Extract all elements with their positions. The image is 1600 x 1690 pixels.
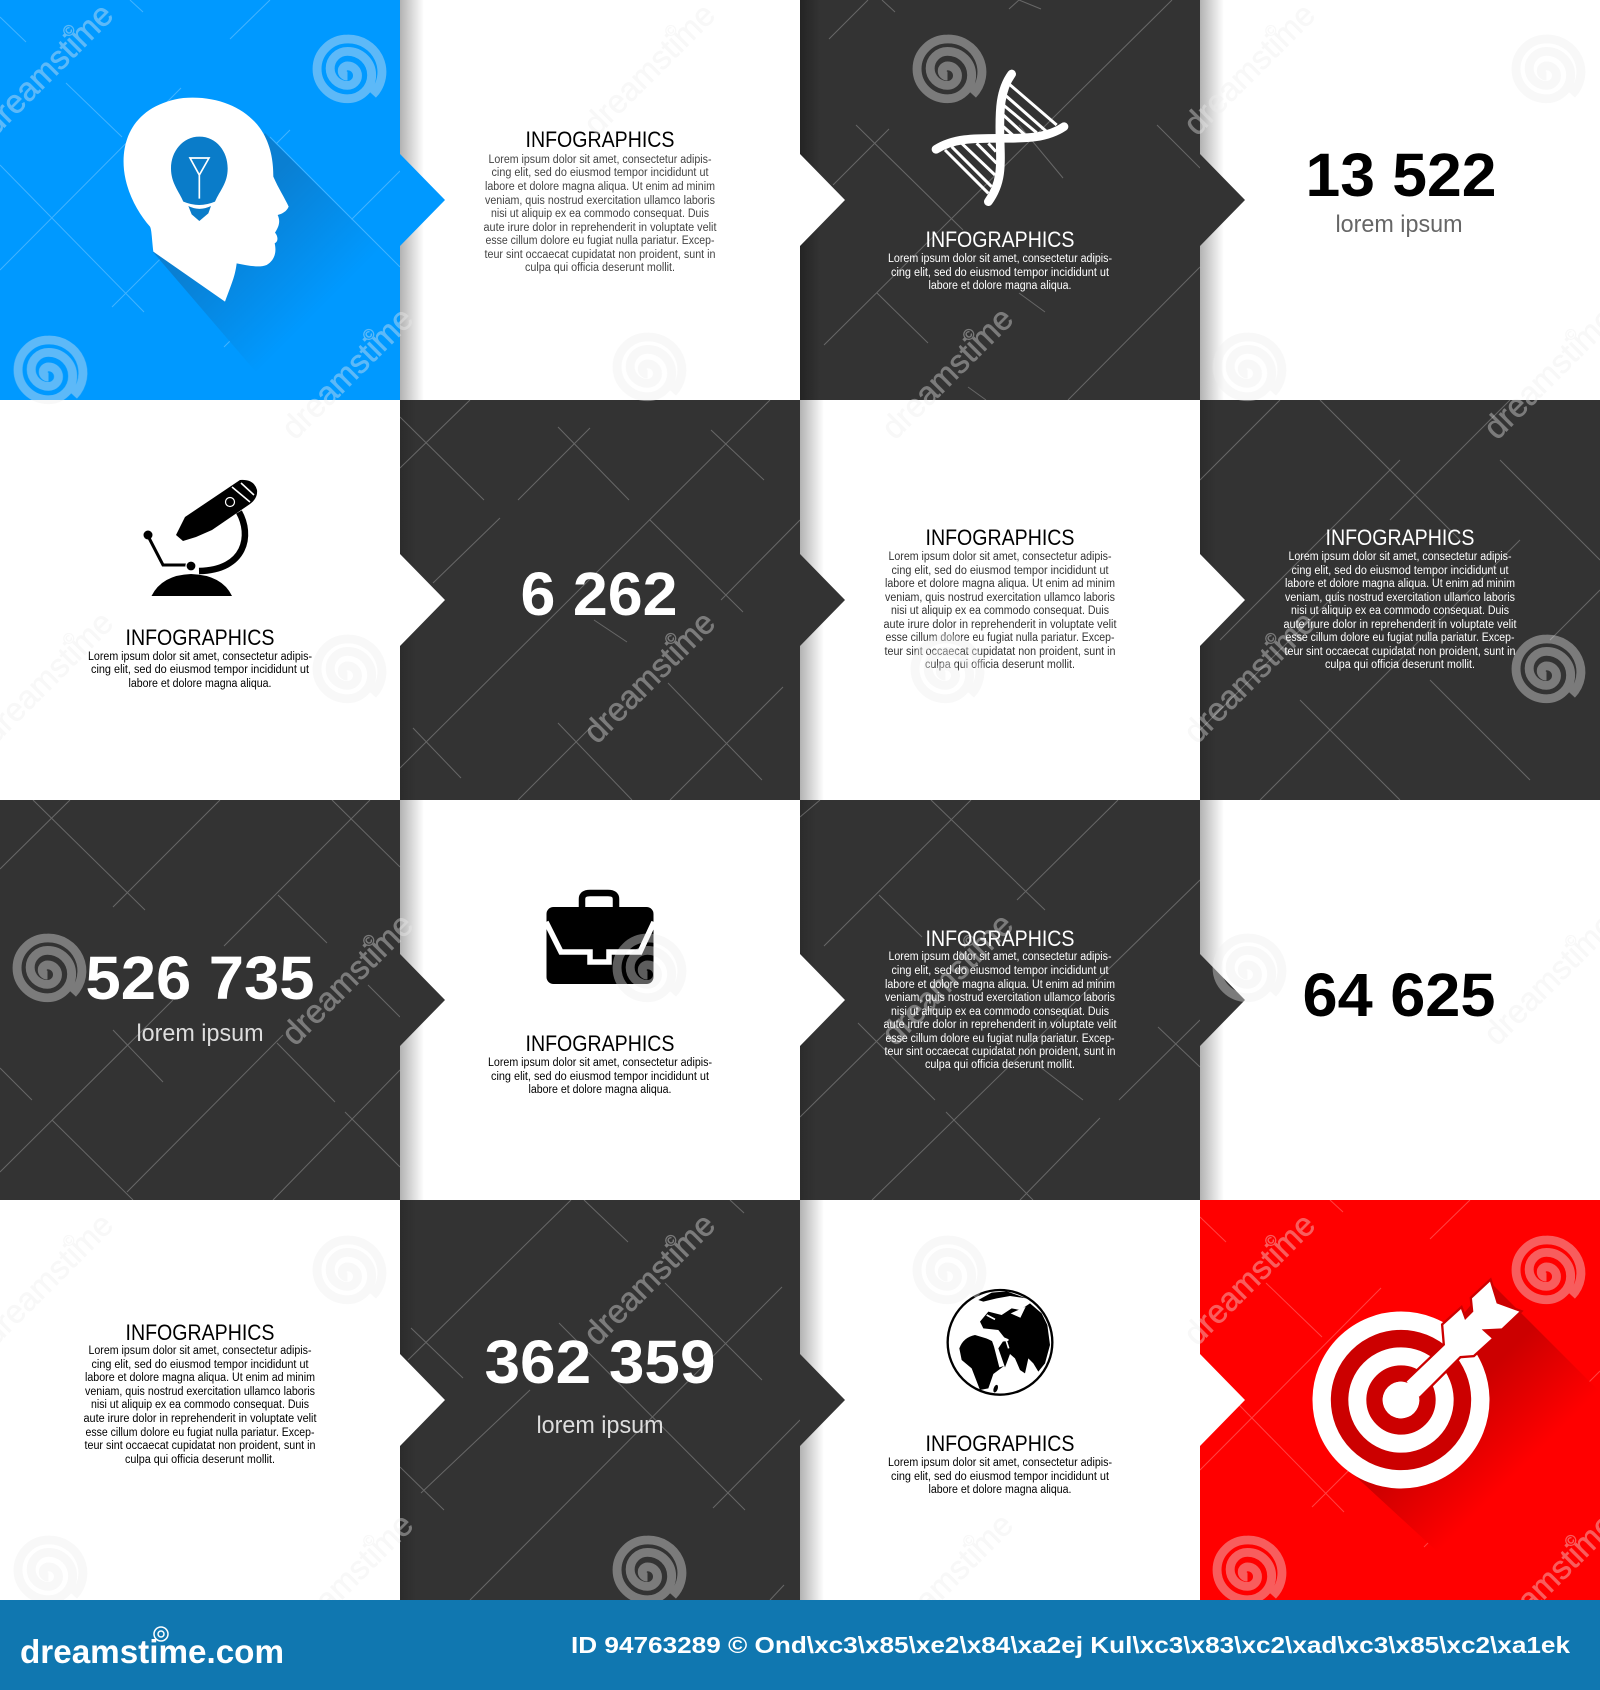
icon: briefcase — [546, 893, 654, 984]
watermark overlay: dreamstime spirals and wordmarks: © — [59, 21, 79, 41]
text block: row 2 column 4: Lorem ipsum dolor sit amet, consectetur adipis- — [1288, 551, 1512, 563]
icon: target with arrow — [1322, 1282, 1519, 1479]
text block: row 3 column 3: aute irure dolor in reprehenderit in voluptate velit — [884, 1019, 1117, 1031]
text block: row 1 column 2: Lorem ipsum dolor sit amet, consectetur adipis- — [488, 154, 712, 166]
icon: head with light bulb — [124, 98, 289, 302]
text block: row 3 column 2: INFOGRAPHICS — [526, 1031, 674, 1056]
text block: row 3 column 3 — [884, 926, 1117, 1071]
stat: 13 522 — [1306, 141, 1496, 238]
text block: row 1 column 2: INFOGRAPHICS — [526, 127, 674, 152]
text block: row 2 column 3: aute irure dolor in reprehenderit in voluptate velit — [884, 619, 1117, 631]
text block: row 2 column 4: aute irure dolor in reprehenderit in voluptate velit — [1284, 619, 1517, 631]
icon: dna helix — [936, 74, 1064, 202]
text block: row 2 column 3: veniam, quis nostrud exercitation ullamco laboris — [885, 592, 1115, 604]
text block: row 3 column 3: culpa qui officia deserunt mollit. — [925, 1059, 1075, 1071]
text block: row 4 column 1: Lorem ipsum dolor sit amet, consectetur adipis- — [88, 1345, 312, 1357]
text block: row 4 column 3: INFOGRAPHICS — [926, 1431, 1074, 1456]
text block: row 1 column 2: teur sint occaecat cupidatat non proident, sunt in — [484, 249, 716, 261]
text block: row 4 column 1: esse cillum dolore eu fugiat nulla pariatur. Excep- — [86, 1427, 315, 1439]
stat: 526 735 — [86, 944, 314, 1047]
text block: row 2 column 1: labore et dolore magna aliqua. — [128, 678, 272, 690]
stat: 13 522: 13 522 — [1306, 141, 1496, 209]
stat: 13 522: lorem ipsum — [1336, 211, 1462, 238]
text block: row 2 column 4: INFOGRAPHICS — [1326, 525, 1474, 550]
text block: row 4 column 1 — [84, 1320, 317, 1466]
stat: 362 359: lorem ipsum — [536, 1412, 664, 1439]
text block: row 1 column 2: esse cillum dolore eu fugiat nulla pariatur. Excep- — [486, 235, 715, 247]
text block: row 2 column 1: cing elit, sed do eiusmod tempor incididunt ut — [91, 664, 310, 676]
text block: row 2 column 4: teur sint occaecat cupidatat non proident, sunt in — [1284, 646, 1516, 658]
text block: row 4 column 1: nisi ut aliquip ex ea commodo consequat. Duis — [91, 1399, 309, 1411]
text block: row 1 column 3: labore et dolore magna aliqua. — [928, 280, 1072, 292]
icon shadow: head long shadow — [153, 133, 400, 400]
stat: 64 625: 64 625 — [1302, 961, 1496, 1029]
arrow connectors — [400, 154, 1245, 1446]
text block: row 2 column 1: INFOGRAPHICS — [126, 625, 274, 650]
text block: row 2 column 4: esse cillum dolore eu fugiat nulla pariatur. Excep- — [1286, 632, 1515, 644]
text block: row 2 column 3: teur sint occaecat cupidatat non proident, sunt in — [884, 646, 1116, 658]
text block: row 2 column 3: labore et dolore magna aliqua. Ut enim ad minim — [885, 578, 1115, 590]
stat: 526 735: lorem ipsum — [136, 1020, 264, 1047]
text block: row 4 column 1: INFOGRAPHICS — [126, 1320, 274, 1345]
text block: row 3 column 2: cing elit, sed do eiusmod tempor incididunt ut — [491, 1071, 710, 1083]
text block: row 3 column 3: veniam, quis nostrud exercitation ullamco laboris — [885, 992, 1115, 1004]
text block: row 2 column 3: Lorem ipsum dolor sit amet, consectetur adipis- — [888, 551, 1112, 563]
icon: globe — [948, 1290, 1052, 1395]
footer credit: ID 94763289 © Ond\xc3\x85\xe2\x84\xa2ej Kul\xc3\x83\xc2\xad\xc3\x85\xc2\xa1ek — [571, 1632, 1570, 1658]
text block: row 2 column 1 — [88, 625, 312, 690]
text block: row 2 column 1: Lorem ipsum dolor sit amet, consectetur adipis- — [88, 651, 312, 663]
footer bar — [0, 1600, 1600, 1690]
text block: row 1 column 3: cing elit, sed do eiusmod tempor incididunt ut — [891, 267, 1110, 279]
text block: row 2 column 4: nisi ut aliquip ex ea commodo consequat. Duis — [1291, 605, 1509, 617]
text block: row 3 column 3: labore et dolore magna aliqua. Ut enim ad minim — [885, 979, 1115, 991]
text block: row 1 column 2: culpa qui officia deserunt mollit. — [525, 262, 675, 274]
text block: row 1 column 2: veniam, quis nostrud exercitation ullamco laboris — [485, 195, 715, 207]
text block: row 2 column 4: labore et dolore magna aliqua. Ut enim ad minim — [1285, 578, 1515, 590]
text block: row 4 column 3: labore et dolore magna aliqua. — [928, 1484, 1072, 1496]
text block: row 3 column 2: labore et dolore magna aliqua. — [528, 1084, 672, 1096]
stat: 362 359: 362 359 — [484, 1328, 716, 1396]
text block: row 2 column 3: nisi ut aliquip ex ea commodo consequat. Duis — [891, 605, 1109, 617]
text block: row 3 column 3: INFOGRAPHICS — [926, 926, 1074, 951]
text block: row 4 column 1: teur sint occaecat cupidatat non proident, sunt in — [84, 1440, 316, 1452]
icon: microscope — [144, 480, 257, 596]
text block: row 4 column 1: aute irure dolor in reprehenderit in voluptate velit — [84, 1413, 317, 1425]
text block: row 4 column 3: Lorem ipsum dolor sit amet, consectetur adipis- — [888, 1457, 1112, 1469]
stat: 6 262: 6 262 — [520, 560, 678, 628]
text block: row 3 column 2 — [488, 1031, 712, 1096]
text block: row 1 column 2 — [484, 127, 717, 274]
text block: row 3 column 3: cing elit, sed do eiusmod tempor incididunt ut — [892, 965, 1109, 977]
text block: row 2 column 4 — [1284, 525, 1517, 671]
text block: row 4 column 1: veniam, quis nostrud exercitation ullamco laboris — [85, 1386, 315, 1398]
text block: row 2 column 4: cing elit, sed do eiusmod tempor incididunt ut — [1292, 565, 1509, 577]
text block: row 2 column 3: cing elit, sed do eiusmod tempor incididunt ut — [892, 565, 1109, 577]
text block: row 4 column 1: labore et dolore magna aliqua. Ut enim ad minim — [85, 1372, 315, 1384]
text block: row 1 column 3: INFOGRAPHICS — [926, 227, 1074, 252]
text block: row 4 column 1: cing elit, sed do eiusmod tempor incididunt ut — [92, 1359, 309, 1371]
text block: row 2 column 3 — [884, 525, 1117, 671]
text block: row 2 column 4: culpa qui officia deserunt mollit. — [1325, 659, 1475, 671]
text block: row 2 column 3: culpa qui officia deserunt mollit. — [925, 659, 1075, 671]
text block: row 2 column 3: esse cillum dolore eu fugiat nulla pariatur. Excep- — [886, 632, 1115, 644]
text block: row 1 column 3: Lorem ipsum dolor sit amet, consectetur adipis- — [888, 253, 1112, 265]
text block: row 3 column 3: teur sint occaecat cupidatat non proident, sunt in — [884, 1046, 1116, 1058]
text block: row 4 column 3 — [888, 1431, 1112, 1496]
text block: row 3 column 3: nisi ut aliquip ex ea commodo consequat. Duis — [891, 1006, 1109, 1018]
stat: 362 359 — [484, 1328, 716, 1439]
footer logo: dreamstime.com — [20, 1633, 284, 1670]
text block: row 1 column 2: labore et dolore magna aliqua. Ut enim ad minim — [485, 181, 715, 193]
text block: row 3 column 2: Lorem ipsum dolor sit amet, consectetur adipis- — [488, 1057, 712, 1069]
text block: row 3 column 3: esse cillum dolore eu fugiat nulla pariatur. Excep- — [886, 1033, 1115, 1045]
text block: row 2 column 4: veniam, quis nostrud exercitation ullamco laboris — [1285, 592, 1515, 604]
text block: row 3 column 3: Lorem ipsum dolor sit amet, consectetur adipis- — [888, 951, 1112, 963]
text block: row 4 column 1: culpa qui officia deserunt mollit. — [125, 1454, 275, 1466]
stat: 526 735: 526 735 — [86, 944, 314, 1012]
text block: row 1 column 2: aute irure dolor in reprehenderit in voluptate velit — [484, 222, 717, 234]
text block: row 4 column 3: cing elit, sed do eiusmod tempor incididunt ut — [891, 1471, 1110, 1483]
text block: row 1 column 2: nisi ut aliquip ex ea commodo consequat. Duis — [491, 208, 709, 220]
text block: row 1 column 3 — [888, 227, 1112, 292]
icon shadow: target long shadow — [1340, 1282, 1600, 1600]
text block: row 2 column 3: INFOGRAPHICS — [926, 525, 1074, 550]
text block: row 1 column 2: cing elit, sed do eiusmod tempor incididunt ut — [492, 167, 709, 179]
